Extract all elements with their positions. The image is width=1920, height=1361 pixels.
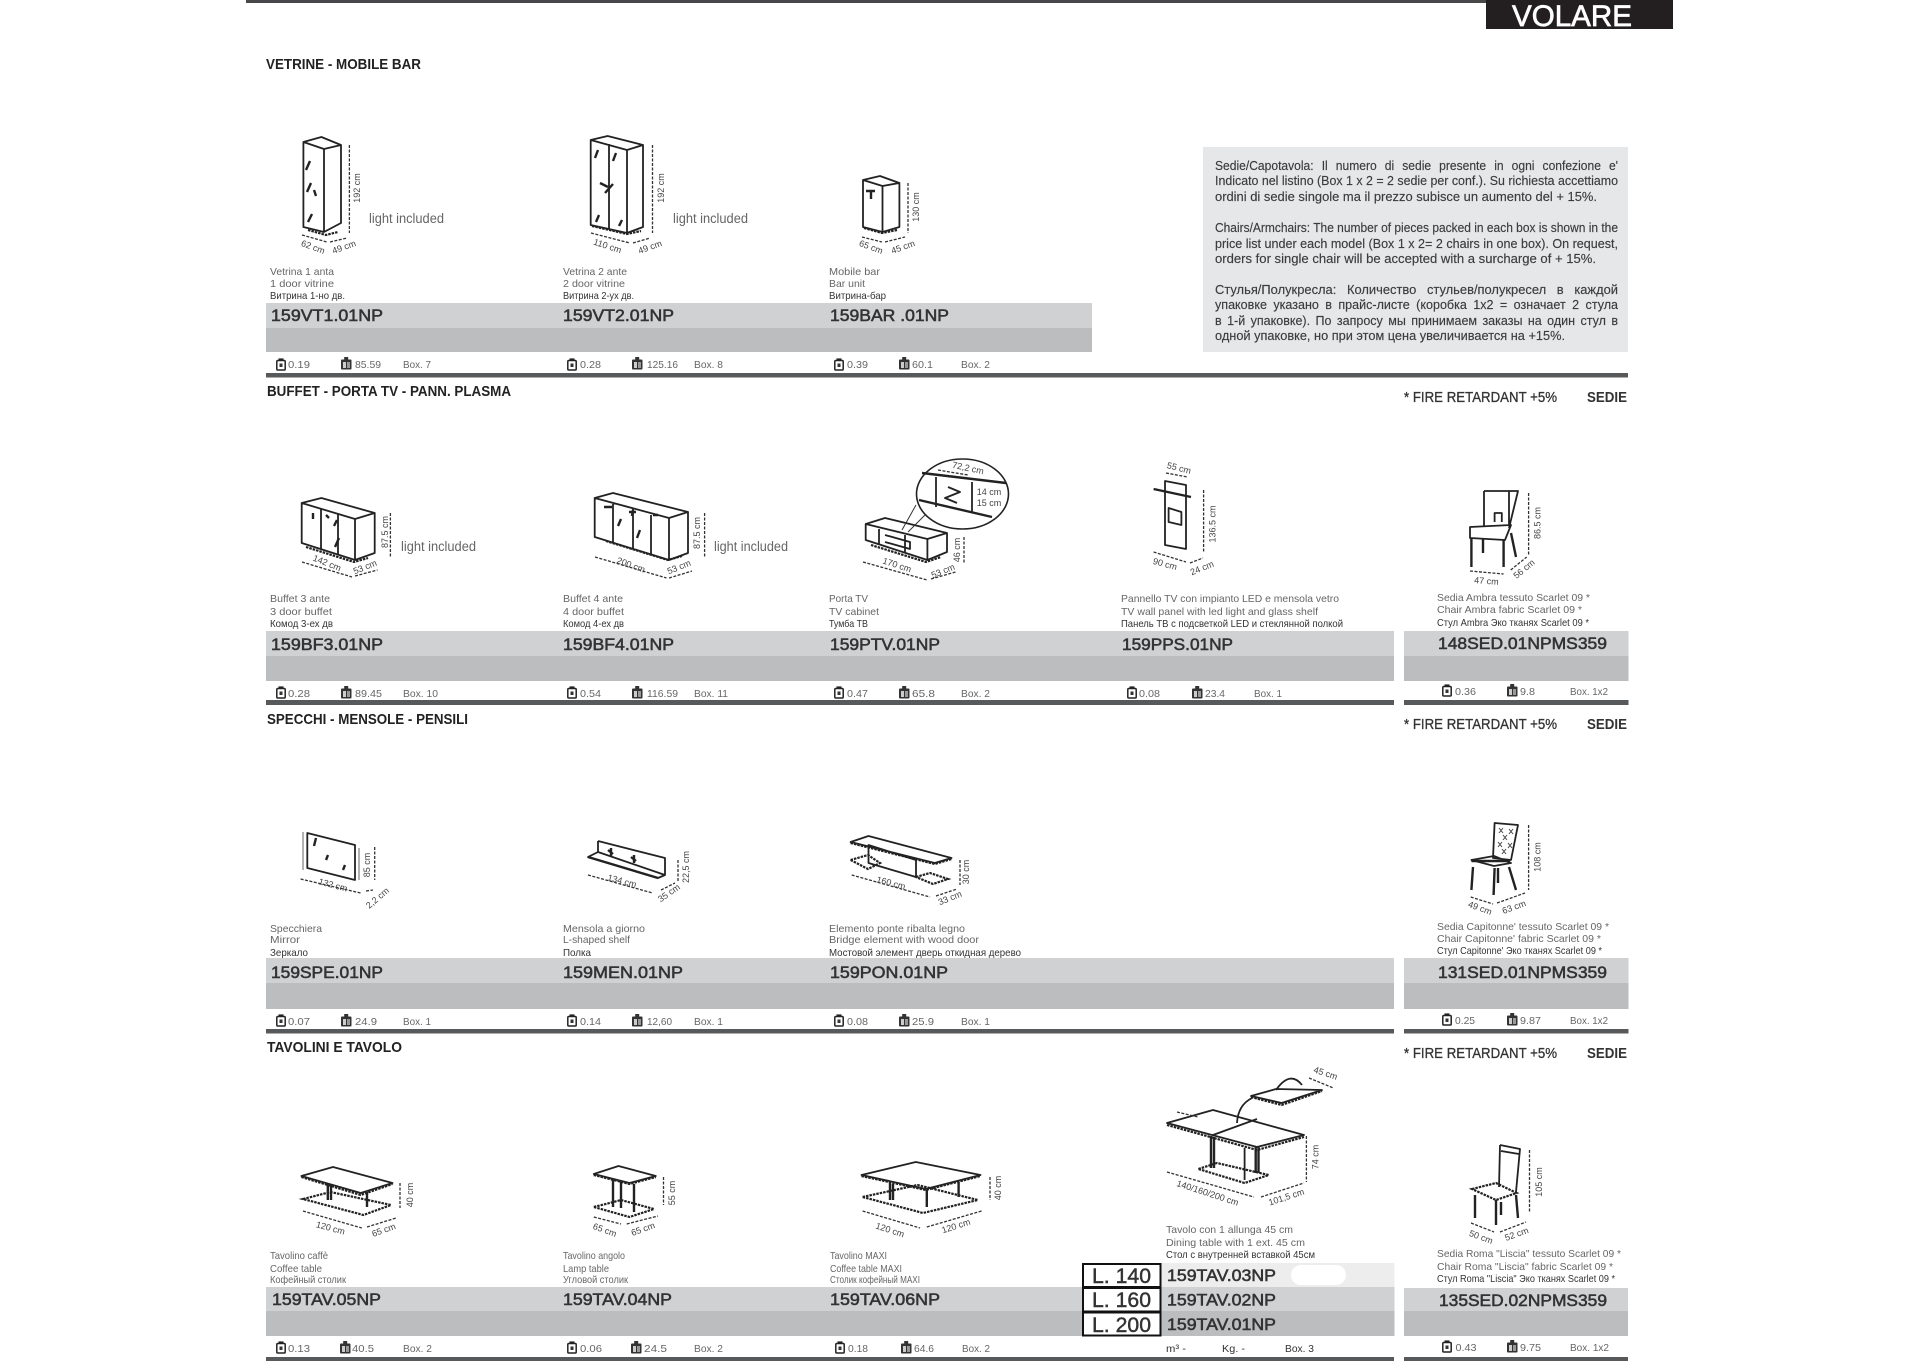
stats — [277, 1014, 431, 1028]
product code: 159SPE.01NP — [271, 964, 383, 982]
product code: 159TAV.06NP — [830, 1291, 940, 1309]
stats: 0.19 — [288, 359, 310, 371]
panel: chair packing note: ordini di sedie singole ma il prezzo subisce un aumento del + 15%. — [1215, 189, 1597, 204]
stats: Box. 2 — [403, 1343, 432, 1355]
description: Стул Capitonne' Эко тканях Scarlet 09 * — [1437, 945, 1602, 957]
product: lamp table — [563, 1166, 723, 1355]
drawing: TV cabinet with detail circle: 14 cm — [977, 487, 1001, 497]
panel: chair packing note: одной упаковке, но при этом цена увеличивается на +15%. — [1215, 328, 1565, 343]
drawing: TV cabinet with detail circle — [863, 459, 1008, 580]
stats: 23.4 — [1205, 688, 1225, 700]
drawing: bar unit: 45 cm — [890, 238, 916, 256]
product: 4 door buffet — [563, 493, 788, 700]
description: Specchiera — [270, 923, 322, 935]
length label: L. 200: L. 200 — [1092, 1314, 1151, 1337]
product codes: 159TAV.01NP — [1167, 1316, 1276, 1334]
description — [1437, 921, 1609, 957]
stats: 116.59 — [647, 688, 678, 700]
description: Chair Ambra fabric Scarlet 09 * — [1437, 604, 1582, 616]
stats: Box. 1 — [403, 1016, 431, 1028]
stats: Box. 2 — [962, 1343, 990, 1355]
drawing: extending dining table: 101,5 cm — [1267, 1187, 1306, 1207]
drawing: chair Capitonne: 63 cm — [1501, 898, 1527, 916]
product: chair Ambra — [1404, 390, 1628, 698]
description: Coffee table — [270, 1263, 322, 1275]
stats: 65.8 — [912, 688, 935, 700]
description: Lamp table — [563, 1263, 609, 1275]
drawing: chair Roma: 52 cm — [1503, 1225, 1530, 1243]
stats: 25.9 — [912, 1016, 934, 1028]
stats: 0.18 — [848, 1343, 868, 1355]
description: Bridge element with wood door — [829, 934, 980, 946]
stats: 24.5 — [644, 1343, 667, 1355]
stats — [568, 357, 723, 371]
description — [1437, 1248, 1621, 1285]
stats: Box. 2 — [961, 359, 990, 371]
stats: 0.13 — [288, 1343, 310, 1355]
stats: 0.08 — [847, 1016, 868, 1028]
drawing: mirror — [301, 832, 391, 911]
drawing: chair Ambra: 86.5 cm — [1532, 507, 1542, 539]
stats: 12,60 — [647, 1016, 672, 1028]
heading: sedie: SEDIE — [1587, 390, 1627, 406]
product: TV wall panel — [1121, 460, 1343, 700]
stats — [1443, 684, 1608, 698]
drawing: 3 door buffet: 53 cm — [352, 558, 378, 576]
product code: 159BF3.01NP — [271, 636, 383, 654]
stats: 89.45 — [355, 688, 382, 700]
panel: chair packing note: orders for single chair will be accepted with a surcharge of + 15%. — [1215, 251, 1596, 266]
drawing: lamp table — [592, 1166, 677, 1239]
description — [270, 923, 322, 959]
description: Mobile bar — [829, 266, 881, 278]
stats — [835, 686, 990, 700]
drawing: extending dining table: 140/160/200 cm — [1175, 1178, 1240, 1208]
drawing: lamp table: 65 cm — [630, 1220, 656, 1238]
note: light included: light included — [369, 211, 444, 226]
stats — [277, 1341, 432, 1355]
description: Витрина-бар — [829, 290, 886, 302]
panel: chair packing note: Indicato nel listino (Box 1 x 2 = 2 sedie per conf.). Su richiesta accettiamo — [1215, 173, 1618, 188]
description: 4 door buffet — [563, 606, 624, 618]
drawing: bar unit: 130 cm — [911, 192, 921, 222]
description: Витрина 1-но дв. — [270, 290, 345, 302]
stats: 9.8 — [1520, 686, 1535, 698]
header label: VOLARE: VOLARE — [1512, 0, 1632, 33]
description: TV wall panel with led light and glass shelf — [1121, 606, 1318, 618]
description — [829, 923, 1021, 959]
stats: Box. 1x2 — [1570, 1015, 1608, 1027]
description: Стул Ambra Эко тканях Scarlet 09 * — [1437, 617, 1589, 629]
length label: L. 160: L. 160 — [1092, 1289, 1151, 1312]
drawing: bridge element: 33 cm — [937, 889, 963, 907]
drawing: 1 door vitrine: 192 cm — [352, 173, 362, 203]
drawing: 3 door buffet — [302, 498, 390, 577]
description: Стул Roma "Liscia" Эко тканях Scarlet 09 * — [1437, 1273, 1615, 1285]
product code: 131SED.01NPMS359 — [1438, 964, 1607, 982]
grey code bar — [266, 1287, 1083, 1336]
description: Porta TV — [829, 593, 868, 605]
length label: L. 140: L. 140 — [1092, 1265, 1151, 1288]
grey code bar — [266, 303, 1092, 352]
description: Buffet 4 ante — [563, 593, 623, 605]
stats: 0.08 — [1139, 688, 1160, 700]
product: 1 door vitrine — [270, 137, 444, 371]
drawing: chair Ambra: 47 cm — [1474, 575, 1499, 587]
drawing: 1 door vitrine: 62 cm — [300, 238, 326, 256]
product: L-shaped shelf — [563, 841, 723, 1028]
stats: 125.16 — [647, 359, 678, 371]
stats: Kg. - — [1222, 1343, 1246, 1355]
drawing: chair Roma — [1468, 1145, 1544, 1246]
drawing: 4 door buffet: 200 cm — [615, 555, 647, 575]
drawing: 2 door vitrine — [591, 136, 666, 256]
description: L-shaped shelf — [563, 934, 630, 946]
drawing: mirror: 132 cm — [317, 876, 349, 894]
product: coffee table — [270, 1167, 432, 1355]
section: tables — [266, 1039, 1628, 1355]
drawing: 2 door vitrine: 192 cm — [656, 173, 666, 203]
section divider rule — [266, 1029, 1628, 1034]
section: buffet and TV — [266, 383, 1628, 700]
description: 2 door vitrine — [563, 278, 625, 290]
product: bridge element — [829, 836, 1021, 1028]
stats — [568, 1014, 723, 1028]
description: Chair Capitonne' fabric Scarlet 09 * — [1437, 933, 1601, 945]
description: Sedia Capitonne' tessuto Scarlet 09 * — [1437, 921, 1609, 933]
stats: 9.75 — [1520, 1342, 1541, 1354]
product code: 159PTV.01NP — [830, 636, 940, 654]
stats — [835, 1014, 990, 1028]
grey code bar — [266, 631, 1394, 681]
stats: 0.36 — [1455, 686, 1476, 698]
product code: 159PPS.01NP — [1122, 636, 1233, 654]
drawing: 3 door buffet: 87.5 cm — [380, 516, 390, 548]
description: Buffet 3 ante — [270, 593, 330, 605]
drawing: chair Capitonne — [1467, 823, 1542, 917]
grey code bar — [1404, 1288, 1628, 1336]
product codes: 159TAV.03NP — [1167, 1267, 1276, 1285]
drawing: lamp table: 55 cm — [667, 1181, 677, 1205]
drawing: coffee table: 120 cm — [315, 1219, 346, 1237]
drawing: extending dining table: 45 cm — [1312, 1065, 1339, 1082]
stats — [277, 357, 431, 371]
stats: 9.87 — [1520, 1015, 1541, 1027]
description: Комод 4-ех дв — [563, 618, 624, 630]
stats: 40.5 — [352, 1343, 374, 1355]
stats: 0.28 — [580, 359, 601, 371]
description: Комод 3-ех дв — [270, 618, 333, 630]
drawing: TV wall panel: 136.5 cm — [1208, 505, 1218, 543]
description: Панель ТВ с подсветкой LED и стеклянной полкой — [1121, 618, 1343, 630]
product code: 159PON.01NP — [830, 964, 948, 982]
stats: Box. 8 — [694, 359, 723, 371]
fire retardant note: * FIRE RETARDANT +5% — [1404, 1046, 1557, 1062]
grey code bar — [1404, 631, 1628, 681]
drawing: L-shaped shelf: 134 cm — [606, 872, 638, 890]
stats: 0.06 — [580, 1343, 602, 1355]
product: mobile bar — [829, 176, 990, 371]
section divider rule — [266, 373, 1628, 378]
drawing: TV wall panel: 55 cm — [1166, 460, 1192, 476]
stats: 24.9 — [355, 1016, 377, 1028]
product code: 159VT2.01NP — [563, 307, 674, 325]
drawing: lamp table: 65 cm — [592, 1221, 618, 1239]
drawing: TV cabinet with detail circle: 72,2 cm — [951, 460, 985, 476]
product: chair Roma — [1404, 1046, 1628, 1354]
stats — [835, 357, 990, 371]
product code: 135SED.02NPMS359 — [1439, 1292, 1607, 1310]
description: Pannello TV con impianto LED e mensola vetro — [1121, 593, 1339, 605]
description: Витрина 2-ух дв. — [563, 290, 634, 302]
stats: Box. 1 — [961, 1016, 990, 1028]
drawing: TV wall panel: 90 cm — [1152, 556, 1178, 572]
stats: Box. 1x2 — [1570, 1342, 1609, 1354]
description — [829, 593, 879, 630]
drawing: 2 door vitrine: 110 cm — [592, 237, 623, 255]
description: Tavolino MAXI — [830, 1250, 887, 1262]
drawing: 1 door vitrine: 49 cm — [331, 238, 357, 256]
panel: chair packing note: упаковке указано в прайс-листе (коробка 1x2 = означает 2 стула — [1215, 297, 1619, 312]
description — [563, 266, 634, 302]
stats: 0.43 — [1456, 1342, 1477, 1354]
product code: 159TAV.04NP — [563, 1291, 672, 1309]
grey code bar — [266, 958, 1394, 1009]
stats: 0.39 — [847, 359, 868, 371]
description: Tavolino caffè — [270, 1250, 328, 1262]
note: light included: light included — [673, 211, 748, 226]
description: TV cabinet — [829, 606, 879, 618]
description: Sedia Ambra tessuto Scarlet 09 * — [1437, 592, 1590, 604]
description — [270, 593, 333, 630]
description — [1121, 593, 1343, 630]
note: light included: light included — [401, 539, 476, 554]
description: Dining table with 1 ext. 45 cm — [1166, 1237, 1305, 1249]
drawing: chair Roma: 105 cm — [1534, 1167, 1544, 1197]
description: Tavolino angolo — [563, 1250, 625, 1262]
panel: chair packing note — [1203, 147, 1628, 352]
description — [563, 923, 645, 959]
stats: Box. 1 — [1254, 688, 1282, 700]
fire retardant note: * FIRE RETARDANT +5% — [1404, 717, 1557, 733]
stats: Box. 11 — [694, 688, 728, 700]
description: Угловой столик — [563, 1274, 628, 1286]
stats: Box. 10 — [403, 688, 438, 700]
stats — [1443, 1340, 1609, 1354]
drawing: bar unit — [858, 176, 921, 256]
product code: 159TAV.05NP — [272, 1291, 381, 1309]
description: Mirror — [270, 934, 301, 946]
stats: Box. 3 — [1285, 1343, 1314, 1355]
heading: sedie: SEDIE — [1587, 717, 1627, 733]
product code: 159BF4.01NP — [563, 636, 674, 654]
stats — [836, 1341, 990, 1355]
drawing: chair Ambra: 56 cm — [1511, 557, 1537, 581]
product: 2 door vitrine — [563, 136, 748, 371]
product: chair Capitonne — [1404, 717, 1628, 1027]
panel: chair packing note: Sedie/Capotavola: Il numero di sedie presente in ogni confezione e' — [1215, 158, 1618, 173]
drawing: L-shaped shelf: 35 cm — [656, 882, 682, 904]
product code: 159BAR .01NP — [830, 307, 949, 325]
description — [270, 1250, 346, 1286]
drawing: TV cabinet with detail circle: 15 cm — [977, 498, 1001, 508]
stats: 85.59 — [355, 359, 381, 371]
drawing: coffee table: 40 cm — [405, 1183, 415, 1207]
description — [1166, 1224, 1315, 1261]
drawing: TV cabinet with detail circle: 46 cm — [952, 538, 962, 562]
description: Тумба ТВ — [829, 618, 868, 630]
stats — [568, 1341, 723, 1355]
drawing: extending dining table: 74 cm — [1311, 1145, 1321, 1169]
product: mirror — [270, 832, 431, 1028]
product code: 159VT1.01NP — [271, 307, 383, 325]
panel: chair packing note: Chairs/Armchairs: The number of pieces packed in each box is shown in the — [1215, 220, 1618, 235]
fire retardant note: * FIRE RETARDANT +5% — [1404, 390, 1557, 406]
section: vetrine and mobile bar — [266, 56, 1092, 371]
description: Mensola a giorno — [563, 923, 645, 935]
drawing: 4 door buffet — [595, 493, 705, 578]
stats — [1128, 686, 1282, 700]
description: Стол с внутренней вставкой 45см — [1166, 1249, 1315, 1261]
description: Sedia Roma "Liscia" tessuto Scarlet 09 * — [1437, 1248, 1621, 1260]
stats: m³ - — [1166, 1343, 1187, 1355]
description: Elemento ponte ribalta legno — [829, 923, 965, 935]
drawing: 2 door vitrine: 49 cm — [637, 238, 663, 256]
drawing: extending dining table — [1167, 1065, 1339, 1208]
description: Полка — [563, 947, 591, 959]
drawing: chair Capitonne: 108 cm — [1532, 842, 1542, 872]
stats: 0.47 — [847, 688, 868, 700]
section: mirrors and shelves — [266, 711, 1628, 1028]
heading: sedie: SEDIE — [1587, 1046, 1627, 1062]
section divider rule — [266, 700, 1628, 705]
product code: 148SED.01NPMS359 — [1438, 635, 1607, 653]
description: Tavolo con 1 allunga 45 cm — [1166, 1224, 1293, 1236]
drawing: chair Ambra — [1470, 491, 1542, 587]
drawing: TV wall panel — [1152, 460, 1218, 577]
product: coffee table MAXI — [830, 1162, 1003, 1355]
description: Vetrina 2 ante — [563, 266, 627, 278]
description — [830, 1250, 920, 1286]
product codes: 159TAV.02NP — [1167, 1292, 1276, 1310]
drawing: TV cabinet with detail circle: 170 cm — [881, 556, 913, 574]
section heading: TAVOLINI E TAVOLO — [267, 1039, 402, 1056]
description: Vetrina 1 anta — [270, 266, 334, 278]
stats: Box. 1x2 — [1570, 686, 1608, 698]
description — [563, 593, 624, 630]
stats: 0.25 — [1455, 1015, 1475, 1027]
description: 1 door vitrine — [270, 278, 334, 290]
panel: chair packing note: в 1-й упаковке). По запросу мы принимаем заказы на один стул в — [1215, 313, 1618, 328]
drawing: coffee table MAXI: 120 cm — [940, 1217, 972, 1235]
drawing: coffee table MAXI — [862, 1162, 1003, 1239]
drawing: coffee table MAXI: 40 cm — [993, 1176, 1003, 1200]
stats: 60.1 — [912, 359, 933, 371]
drawing: coffee table MAXI: 120 cm — [874, 1221, 906, 1239]
header label: VOLARE — [1486, 0, 1673, 33]
description: Зеркало — [270, 947, 308, 959]
drawing: 4 door buffet: 87.5 cm — [692, 517, 702, 549]
description — [270, 266, 345, 302]
top header rule — [246, 0, 1487, 3]
drawing: 4 door buffet: 53 cm — [666, 558, 692, 576]
stats: Box. 2 — [694, 1343, 723, 1355]
stats: 0.07 — [288, 1016, 310, 1028]
description: 3 door buffet — [270, 606, 332, 618]
section heading: BUFFET - PORTA TV - PANN. PLASMA — [267, 383, 511, 400]
description — [1437, 592, 1590, 629]
drawing: L-shaped shelf: 22,5 cm — [681, 851, 691, 883]
description: Мостовой элемент дверь откидная дерево — [829, 947, 1021, 959]
product: dining table — [1083, 1065, 1394, 1355]
description: Coffee table MAXI — [830, 1263, 902, 1275]
description: Chair Roma "Liscia" fabric Scarlet 09 * — [1437, 1261, 1613, 1273]
grey code bar — [1404, 958, 1628, 1009]
stats — [568, 686, 728, 700]
note: light included: light included — [714, 539, 788, 554]
drawing: coffee table — [301, 1167, 415, 1239]
drawing: TV cabinet with detail circle: 53 cm — [930, 562, 956, 580]
stats: Box. 7 — [403, 359, 431, 371]
section heading: SPECCHI - MENSOLE - PENSILI — [267, 711, 468, 728]
stats — [1166, 1343, 1314, 1355]
stats: 64.6 — [914, 1343, 934, 1355]
drawing: bridge element: 160 cm — [875, 874, 907, 892]
product code: 159MEN.01NP — [563, 964, 683, 982]
description: Кофейный столик — [270, 1274, 346, 1286]
panel: chair packing note: Стулья/Полукресла: Количество стульев/полукресел в каждой — [1215, 282, 1618, 297]
drawing: coffee table: 65 cm — [370, 1221, 397, 1239]
drawing: bridge element: 30 cm — [961, 860, 971, 884]
stats: 0.28 — [288, 688, 310, 700]
drawing: mirror: 2,2 cm — [364, 885, 391, 911]
drawing: TV wall panel: 24 cm — [1189, 559, 1215, 577]
drawing: 1 door vitrine — [300, 137, 362, 256]
section heading: VETRINE - MOBILE BAR — [266, 56, 421, 73]
code rows background — [1160, 1263, 1394, 1336]
description: Bar unit — [829, 278, 865, 290]
drawing: L-shaped shelf — [588, 841, 691, 904]
drawing: chair Roma: 50 cm — [1468, 1228, 1494, 1246]
stats — [1443, 1013, 1608, 1027]
description: Столик кофейный MAXI — [830, 1274, 920, 1286]
product: TV cabinet — [829, 459, 1008, 700]
description — [563, 1250, 628, 1286]
bottom divider rule — [266, 1357, 1628, 1361]
stats — [277, 686, 438, 700]
panel: chair packing note: price list under each model (Box 1 x 2= 2 chairs in one box). On request, — [1215, 236, 1618, 251]
stats: 0.54 — [580, 688, 601, 700]
stats: Box. 2 — [961, 688, 990, 700]
stats: Box. 1 — [694, 1016, 723, 1028]
drawing: mirror: 85 cm — [362, 853, 372, 877]
drawing: bar unit: 65 cm — [858, 238, 884, 256]
drawing: chair Capitonne: 49 cm — [1467, 899, 1493, 917]
drawing: bridge element — [851, 836, 971, 907]
product codes — [1167, 1267, 1276, 1334]
stats: 0.14 — [580, 1016, 601, 1028]
product: 3 door buffet — [270, 498, 476, 700]
drawing: 3 door buffet: 142 cm — [311, 553, 343, 573]
description — [829, 266, 886, 302]
